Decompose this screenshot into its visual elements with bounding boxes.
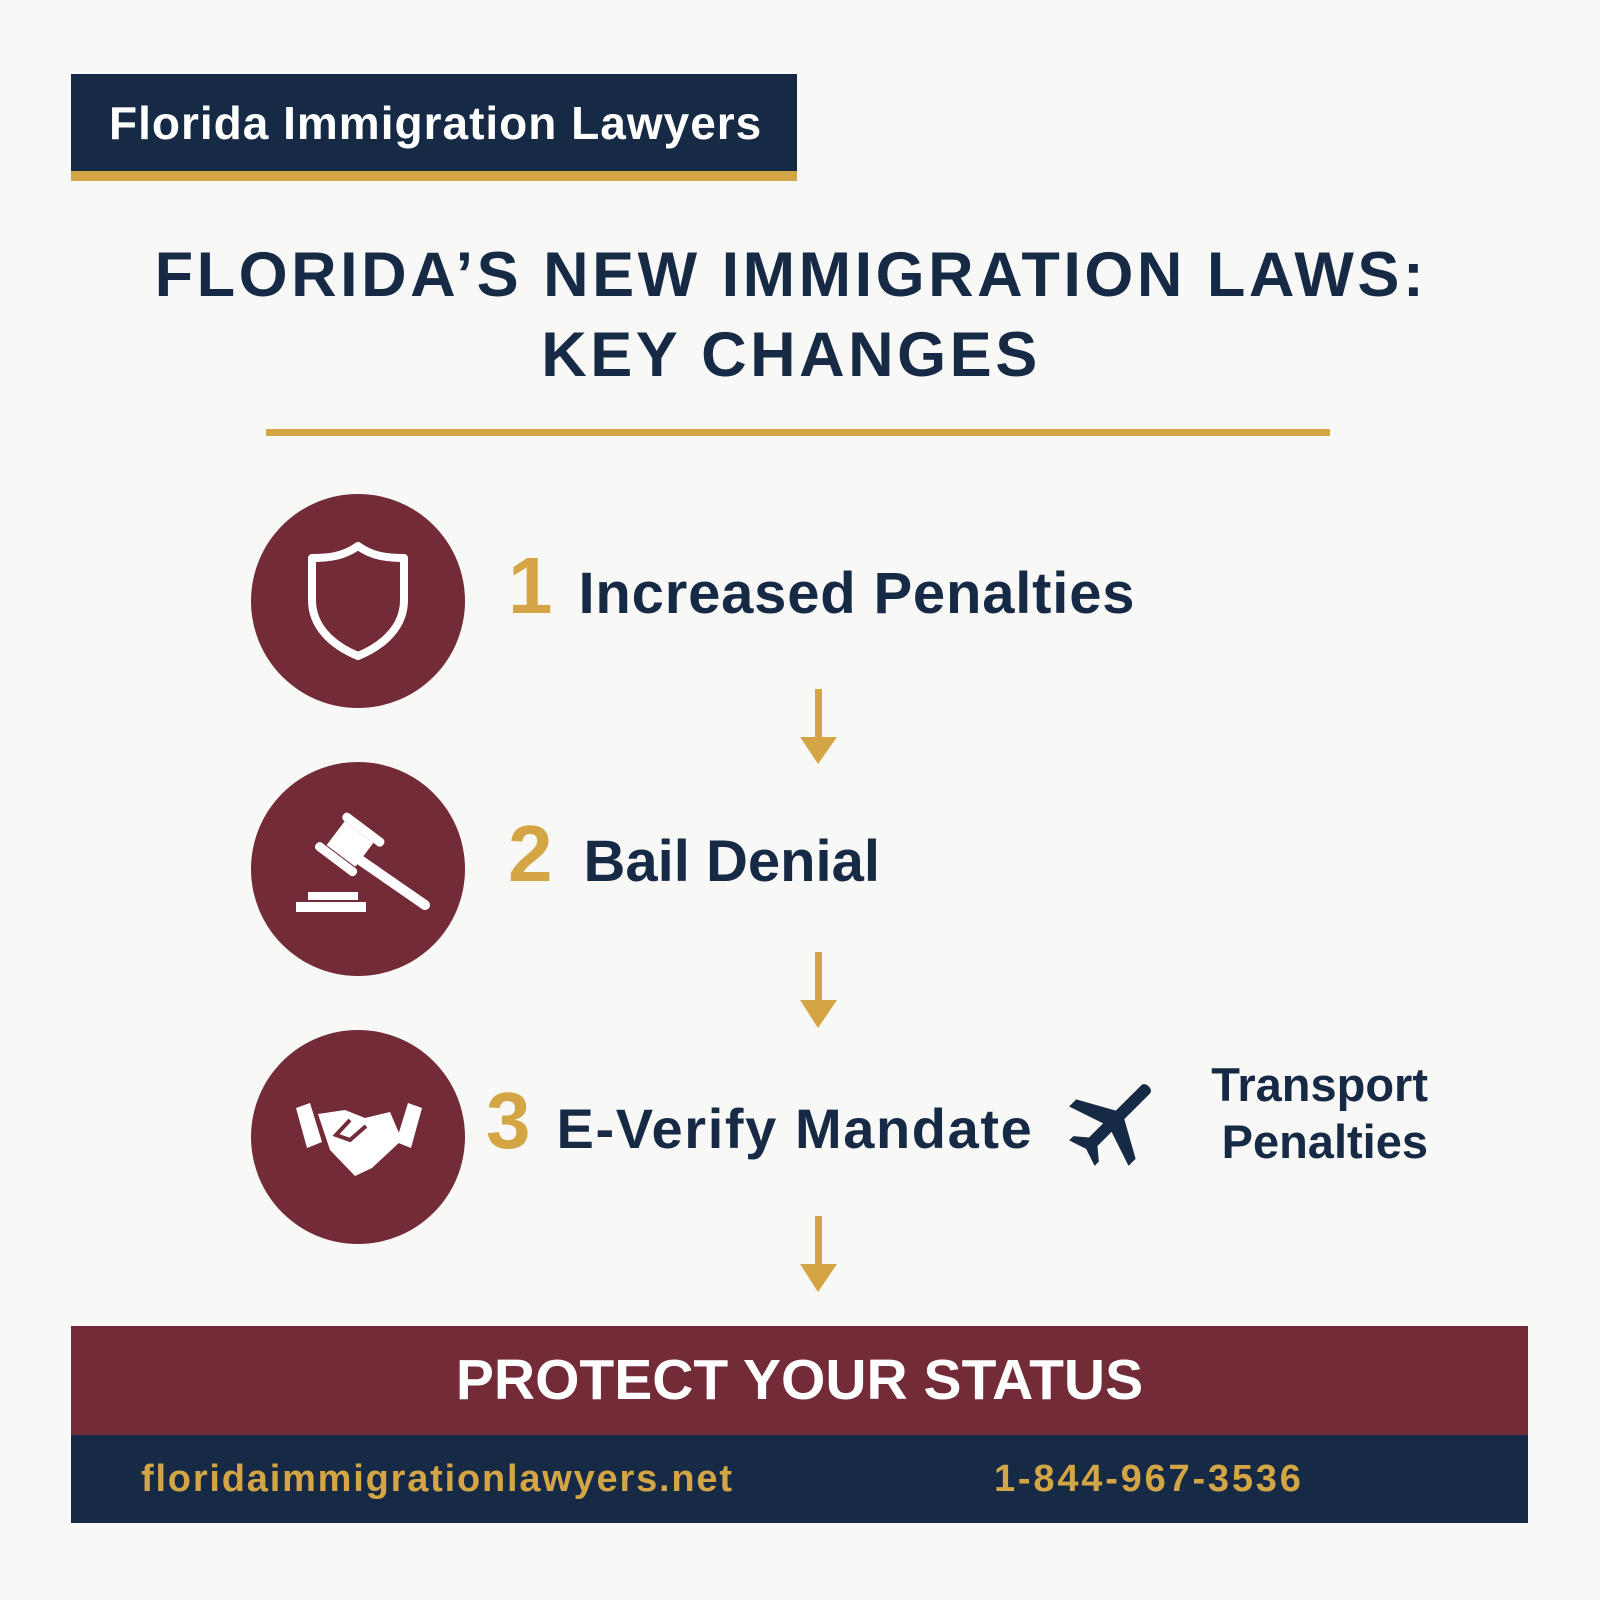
banner: protect your status: PROTECT YOUR STATUS [456,1348,1143,1412]
icon: shield circle [251,494,465,708]
title [155,240,1427,390]
header badge: Florida Immigration Lawyers [109,97,762,149]
footer contact: floridaimmigrationlawyers.net [141,1458,734,1500]
title: KEY CHANGES [541,320,1041,390]
title: FLORIDA’S NEW IMMIGRATION LAWS: [155,240,1427,310]
arrow 1 [800,689,837,764]
header badge [71,74,797,181]
transport penalties: Penalties [1222,1115,1428,1168]
icon: airplane [1052,1057,1178,1183]
item 3 text: 3 E-Verify Mandate [486,1076,1033,1165]
arrow 3 [800,1216,837,1292]
banner: protect your status [71,1326,1528,1435]
footer contact [71,1435,1528,1523]
item 2 text: 2 Bail Denial [508,809,880,898]
icon: handshake circle [251,1030,465,1244]
transport penalties: Transport [1211,1058,1428,1111]
transport penalties [1211,1058,1428,1168]
icon: gavel circle [251,762,465,976]
arrow 2 [800,952,837,1028]
footer contact: 1-844-967-3536 [994,1458,1304,1500]
item 1 text: 1 Increased Penalties [508,541,1135,630]
